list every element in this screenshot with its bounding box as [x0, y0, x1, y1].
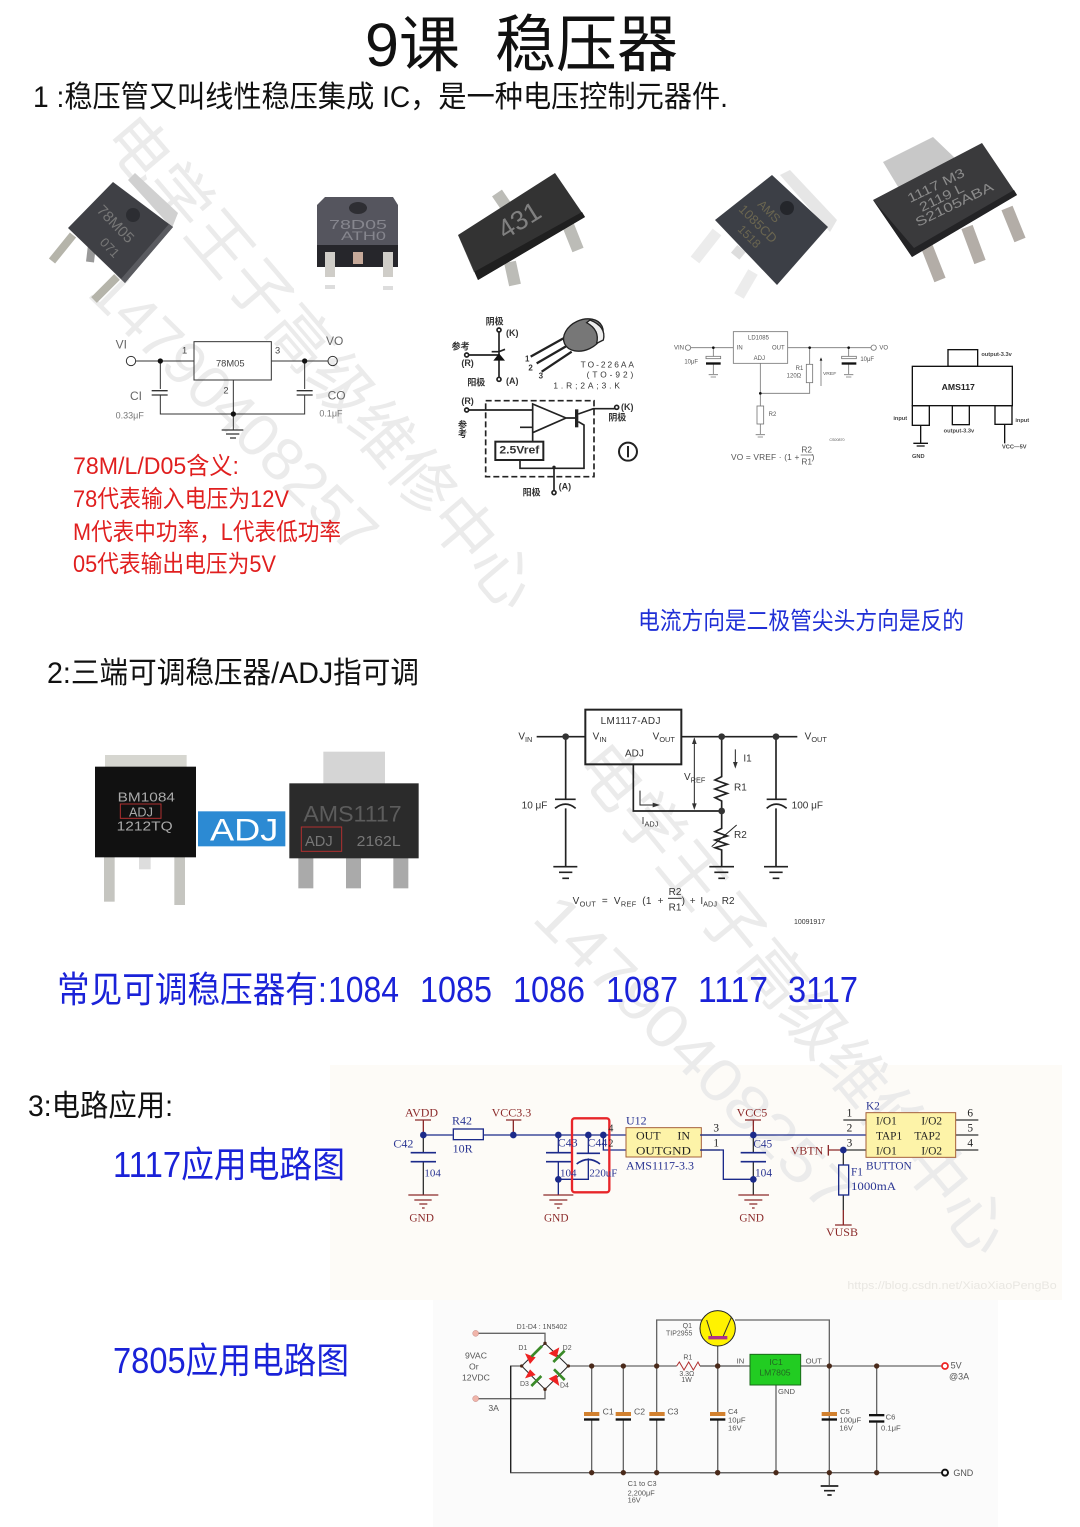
- circuit: TL431: (K): [506, 328, 518, 338]
- pinout: AMS117: output-3.3v: [981, 352, 1013, 358]
- circuit: LD1085: ): [812, 452, 815, 462]
- heading: section 1: 1 :稳压管又叫线性稳压集成 IC，是一种电压控制元器件.: [33, 81, 728, 114]
- circuit: LM1117-ADJ: OUT: [811, 735, 827, 744]
- text: common adjustable regulators: [57, 969, 858, 1010]
- circuit: TL431: (R): [461, 358, 474, 368]
- chip photo: 1117M3: S2105ABA: [913, 179, 996, 230]
- circuit: LD1085: 10μF: [860, 357, 874, 363]
- circuit: 78M05: CI: [130, 389, 142, 403]
- pinout: AMS117: input: [1015, 418, 1029, 424]
- circuit: LM1117-ADJ: REF: [621, 900, 637, 909]
- circuit: 7805 left: D1: [518, 1345, 527, 1352]
- circuit: 7805 left: Or: [469, 1361, 479, 1371]
- circuit: LM1117-ADJ: OUT: [580, 900, 596, 909]
- circuit: LM1117-ADJ: I: [642, 816, 644, 827]
- chip photo: 1117M3: 2119 L: [917, 180, 966, 215]
- badge: ADJ: [198, 811, 285, 848]
- note: current direction: 电流方向是二极管尖头方向是反的: [638, 608, 964, 635]
- circuit: AMS1117 right: [700, 1100, 1057, 1292]
- circuit: TL431: (A): [506, 376, 518, 386]
- circuit: 7805 right: GND: [953, 1468, 974, 1478]
- circuit: TL431: 3: [539, 372, 544, 381]
- chip photo: 431: 431: [492, 196, 546, 245]
- circuit: AMS1117 right: 2: [847, 1123, 853, 1135]
- circuit: TL431: (A): [559, 481, 571, 491]
- circuit: 7805 right: C6: [886, 1412, 895, 1421]
- circuit: LD1085: 10μF: [684, 359, 698, 365]
- circuit: AMS1117 right: TAP2: [914, 1130, 941, 1142]
- heading: section 2: 2:三端可调稳压器/ADJ指可调: [47, 657, 419, 690]
- circuit: AMS1117 left: 104: [560, 1168, 577, 1180]
- circuit: AMS1117 right: 1: [713, 1138, 719, 1150]
- circuit: LD1085: VO = VREF · (1 +: [731, 452, 799, 462]
- pinout: AMS117: VCC—5V: [1002, 445, 1027, 451]
- circuit: 78M05: VI: [116, 337, 127, 351]
- circuit: 7805 left: C2: [634, 1407, 645, 1417]
- circuit: LM1117-ADJ: V: [518, 731, 525, 742]
- circuit: LM1117-ADJ: ) + I: [682, 896, 703, 907]
- circuit: 78M05: 0.1μF: [319, 409, 343, 419]
- label: 1117 application circuit: 1117应用电路图: [113, 1144, 345, 1185]
- circuit: AMS1117 right: I/O2: [921, 1145, 942, 1157]
- circuit: LM1117-ADJ: 10091917: [794, 919, 825, 926]
- circuit: 7805 left: 16V: [628, 1496, 641, 1505]
- circuit: LM1117-ADJ: = V: [596, 896, 621, 907]
- circuit: 7805 left: 9VAC: [465, 1351, 487, 1361]
- circuit: AMS1117 right: VUSB: [826, 1225, 858, 1239]
- chip: AMS1117: 2162L: [357, 834, 401, 850]
- circuit: TL431: 1.R;2A;3.K: [553, 380, 620, 390]
- panel: 7805 schematic background: [433, 1300, 998, 1527]
- text block: 78 series meaning: 78M/L/D05含义:: [73, 453, 239, 480]
- circuit: AMS1117 right: 1000mA: [851, 1181, 897, 1193]
- circuit: 7805 right: [700, 1320, 974, 1495]
- chip photo: AMS1085: 1518: [735, 222, 764, 251]
- circuit: AMS1117 right: 1: [847, 1108, 852, 1120]
- circuit: AMS1117 left: 2: [608, 1139, 613, 1150]
- circuit: LD1085: VIN: [674, 346, 684, 352]
- chip photos: ADJ parts: [95, 752, 419, 905]
- circuit: 78M05: [116, 334, 346, 438]
- chip photo: 78M05: 78M05: [93, 202, 137, 247]
- circuit: LD1085: LD1085: [748, 335, 770, 341]
- circuit: LM1117-ADJ: R1: [669, 903, 682, 914]
- circuit: LD1085: R2: [769, 412, 777, 418]
- chip: AMS1117: [289, 752, 419, 888]
- watermarks: 14790408257: [521, 881, 866, 1226]
- circuit: TL431: [452, 313, 637, 497]
- circuit: AMS1117 right: I/O1: [876, 1145, 897, 1157]
- circuit: LD1085: [674, 332, 888, 467]
- circuit: TL431: 2: [528, 364, 533, 373]
- pinout: AMS117: input: [893, 416, 907, 422]
- chip: AMS1117: AMS1117: [303, 802, 402, 827]
- circuit: AMS1117 right: 6: [967, 1108, 973, 1120]
- circuit: TL431: 1: [525, 355, 530, 364]
- circuit: 7805 left: TIP2955: [666, 1331, 693, 1338]
- circuit: AMS1117 left: C42: [393, 1136, 413, 1150]
- circuit: AMS1117 left: C44: [587, 1136, 607, 1150]
- circuit: TL431: TO-226AA: [581, 359, 634, 369]
- circuit: 7805 right: IN: [737, 1356, 744, 1365]
- circuit: 7805 left: [462, 1311, 740, 1505]
- circuit: AMS1117 left: GND: [409, 1212, 434, 1224]
- circuit: 7805 right: 5V: [951, 1361, 962, 1371]
- circuit: AMS1117 left: AVDD: [405, 1106, 438, 1120]
- circuit: LM1117-ADJ: [518, 710, 827, 926]
- text: common adjustable regulators: 1087: [606, 969, 678, 1010]
- circuit: 7805 left: D4: [560, 1382, 569, 1389]
- circuit: LD1085: ADJ: [754, 356, 765, 362]
- badge: ADJ: ADJ: [210, 813, 278, 848]
- circuit: AMS1117 left: 104: [424, 1168, 441, 1180]
- circuit: 7805 left: D2: [563, 1345, 572, 1352]
- circuit: LM1117-ADJ: ADJ: [703, 900, 717, 909]
- text block: 78 series meaning: M代表中功率，L代表低功率: [73, 519, 341, 546]
- chip photo: 1117M3: [873, 137, 1020, 280]
- chip photo: 78M05: [52, 173, 178, 300]
- watermarks: 电学王子高级维修中心: [562, 729, 1025, 1269]
- title: 9课: [365, 11, 460, 79]
- chip photo: 431: [458, 173, 585, 285]
- circuit: 7805 left: Q1: [683, 1323, 692, 1330]
- heading: section 3: 3:电路应用:: [28, 1090, 173, 1123]
- circuit: LM1117-ADJ: V: [573, 896, 580, 907]
- circuit: LD1085: IN: [737, 346, 743, 352]
- watermarks: 电学王子高级维修中心: [91, 102, 551, 624]
- chip photo: 78M05: 071: [97, 235, 123, 261]
- circuit: 78M05: 3: [275, 345, 280, 355]
- circuit: AMS1117 right: VBTN: [791, 1143, 824, 1157]
- circuit: TL431: 2.5Vref: [499, 445, 540, 457]
- chip: BM1084: 1212TQ: [117, 819, 173, 834]
- circuit: TL431: 参考: [457, 419, 467, 439]
- circuit: LM1117-ADJ: R2: [734, 830, 747, 841]
- circuit: LD1085: CS00870: [829, 438, 845, 442]
- circuit: 7805 right: 0.1μF: [881, 1424, 901, 1433]
- circuit: 7805 right: 10μF: [728, 1416, 746, 1425]
- circuit: AMS1117 left: C43: [558, 1136, 578, 1150]
- circuit: 7805 left: 3.3Ω: [679, 1371, 694, 1378]
- circuit: 7805 right: 100μF: [839, 1416, 862, 1425]
- circuit: LM1117-ADJ: V: [653, 731, 659, 742]
- circuit: LM1117-ADJ: 10 μF: [522, 800, 547, 811]
- circuit: AMS1117 right: C45: [753, 1138, 773, 1150]
- title: 稳压器: [495, 11, 678, 80]
- circuit: AMS1117 right: VCC5: [737, 1106, 767, 1120]
- circuit: LM1117-ADJ: (1 +: [637, 896, 664, 907]
- circuit: 7805 right: @3A: [949, 1371, 969, 1381]
- circuit: 7805 left: 3A: [488, 1403, 499, 1413]
- circuit: AMS1117 right: I/O2: [921, 1115, 942, 1127]
- circuit: AMS1117 right: TAP1: [876, 1130, 902, 1142]
- circuit: LM1117-ADJ: V: [593, 731, 599, 742]
- circuit: AMS1117 left: 10R: [453, 1142, 473, 1156]
- circuit: LD1085: R1: [796, 366, 804, 372]
- circuit: 78M05: 78M05: [216, 359, 245, 369]
- circuit: LD1085: VREF: [823, 371, 836, 377]
- circuit: LM1117-ADJ: OUT: [659, 735, 675, 744]
- chip: AMS1117: ADJ: [305, 834, 333, 850]
- text block: 78 series meaning: 78代表输入电压为12V: [73, 486, 289, 513]
- circuit: LM1117-ADJ: IN: [599, 735, 607, 744]
- circuit: AMS1117 left: R42: [452, 1113, 472, 1127]
- circuit: 78M05: 0.33μF: [116, 411, 144, 421]
- circuit: LM1117-ADJ: V: [805, 731, 811, 742]
- pinout: AMS117: [893, 350, 1029, 460]
- circuit: 7805 right: 16V: [839, 1424, 854, 1433]
- circuit: 7805 left: C1: [603, 1407, 614, 1417]
- circuit: LM1117-ADJ: ADJ: [625, 749, 644, 760]
- circuit: AMS1117 right: 5: [967, 1123, 973, 1135]
- label: 7805 application circuit: 7805应用电路图: [113, 1340, 349, 1381]
- circuit: 7805 right: 16V: [728, 1424, 743, 1433]
- circuit: 7805 right: GND: [778, 1387, 795, 1396]
- circuit: LM1117-ADJ: 100 μF: [792, 800, 823, 811]
- circuit: LM1117-ADJ: R2: [717, 896, 735, 907]
- circuit: LM1117-ADJ: R1: [734, 783, 747, 794]
- chip photo: 78D05: ATH0: [341, 229, 386, 243]
- circuit: AMS1117 left: AMS1117-3.3: [626, 1158, 694, 1172]
- chip: BM1084: [95, 755, 196, 905]
- pinout: AMS117: output-3.3v: [944, 429, 975, 435]
- circuit: 78M05: 2: [223, 385, 229, 395]
- text: common adjustable regulators: 1117: [698, 969, 768, 1010]
- chip photo: AMS1085: [695, 170, 837, 296]
- circuit: 78M05: VO: [326, 334, 343, 348]
- circuit: TL431: 阴极: [486, 316, 504, 327]
- circuit: LM1117-ADJ: REF: [691, 776, 706, 785]
- circuit: 7805 left: C3: [667, 1407, 679, 1417]
- circuit: TL431: (K): [621, 402, 633, 412]
- circuit: AMS1117 left: OUT: [636, 1128, 661, 1142]
- circuit: 7805 left: 12VDC: [462, 1373, 490, 1383]
- text block: 78 series meaning: [73, 453, 341, 578]
- text: common adjustable regulators: 1084: [328, 969, 399, 1010]
- circuit: LD1085: OUT: [772, 346, 785, 352]
- circuit: LM1117-ADJ: I1: [743, 754, 752, 765]
- circuit: LD1085: R1: [801, 457, 812, 467]
- circuit: TL431: 参考: [452, 340, 470, 351]
- chip: BM1084: BM1084: [118, 790, 176, 805]
- chip photo: AMS1085: 1085CD: [736, 202, 780, 246]
- circuit: LM1117-ADJ: ADJ: [644, 820, 659, 829]
- circuit: AMS1117 right: GND: [739, 1212, 764, 1224]
- circuit: 7805 left: C1 to C3: [628, 1479, 657, 1488]
- circuit: AMS1117 left: U12: [626, 1113, 647, 1127]
- circuit: AMS1117 left: VCC3.3: [492, 1106, 531, 1120]
- circuit: AMS1117 right: 3: [847, 1138, 853, 1150]
- circuit: TL431: (R): [461, 396, 474, 406]
- circuit: AMS1117 right: F1: [851, 1166, 863, 1178]
- circuit: 7805 left: 2,200μF: [628, 1488, 655, 1497]
- circuit: LD1085: VO: [879, 346, 888, 352]
- text: common adjustable regulators: 1085: [420, 969, 492, 1010]
- text: common adjustable regulators: 1086: [513, 969, 585, 1010]
- circuit: AMS1117 left: 220uF: [589, 1168, 617, 1180]
- circuit: AMS1117 left: GND: [544, 1212, 569, 1224]
- circuit: AMS1117 right: 3: [713, 1123, 719, 1135]
- title: [365, 11, 678, 80]
- circuit: AMS1117 left: OUTGND: [636, 1143, 691, 1157]
- chip photo: 1117M3: 1117 M3: [905, 165, 967, 206]
- circuit: 7805 left: D1-D4 : 1N5402: [517, 1324, 567, 1331]
- pinout: AMS117: GND: [912, 454, 925, 460]
- watermarks: [77, 102, 1025, 1269]
- circuit: TL431: 阳极: [467, 376, 485, 387]
- circuit: 7805 left: R1: [683, 1354, 692, 1361]
- circuit: 7805 right: OUT: [806, 1356, 822, 1365]
- text block: 78 series meaning: 05代表输出电压为5V: [73, 551, 276, 578]
- text: common adjustable regulators: 3117: [788, 969, 858, 1010]
- circuit: 7805 left: D3: [520, 1381, 529, 1388]
- circuit: TL431: (TO-92): [587, 369, 634, 379]
- pinout: AMS117: AMS117: [942, 382, 975, 392]
- chip photo: 78D05: [317, 197, 398, 290]
- circuit: AMS1117 left: [393, 1106, 720, 1224]
- chip photo: AMS1085: AMS: [755, 197, 783, 226]
- circuit: 7805 right: C4: [728, 1407, 739, 1416]
- text: common adjustable regulators: 常见可调稳压器有:: [57, 969, 327, 1010]
- circuit: 7805 left: 1W: [681, 1377, 692, 1384]
- circuit: 78M05: CO: [328, 388, 346, 402]
- circuit: LM1117-ADJ: IN: [525, 735, 532, 744]
- circuit: 7805 right: C5: [840, 1407, 850, 1416]
- circuit: AMS1117 right: K2: [866, 1100, 880, 1112]
- circuit: 7805 right: LM7805: [759, 1367, 791, 1377]
- circuit: AMS1117 left: IN: [677, 1128, 690, 1142]
- circuit: LD1085: 120Ω: [787, 374, 802, 380]
- panel: 1117 schematic background: [330, 1065, 1062, 1300]
- circuit: TL431: 阳极: [523, 486, 541, 497]
- circuit: AMS1117 right: 104: [755, 1168, 772, 1180]
- circuit: AMS1117 right: BUTTON: [866, 1160, 912, 1172]
- chip: BM1084: ADJ: [129, 805, 153, 819]
- circuit: LD1085: R2: [801, 444, 812, 454]
- chip photo: 78D05: 78D05: [329, 217, 387, 232]
- circuit: LM1117-ADJ: V: [684, 772, 691, 783]
- watermarks: 14790408257: [77, 256, 391, 567]
- circuit: AMS1117 left: 4: [608, 1124, 613, 1135]
- circuit: AMS1117 right: https://blog.csdn.net/XiaoXiaoPengBo: [847, 1280, 1057, 1292]
- circuit: 78M05: 1: [182, 345, 187, 355]
- circuit: 7805 right: IC1: [769, 1357, 783, 1367]
- circuit: TL431: 阴极: [608, 412, 626, 423]
- circuit: LM1117-ADJ: LM1117-ADJ: [601, 716, 661, 727]
- circuit: AMS1117 right: 4: [967, 1138, 973, 1150]
- circuit: AMS1117 right: I/O1: [876, 1115, 897, 1127]
- circuit: LM1117-ADJ: R2: [669, 887, 682, 898]
